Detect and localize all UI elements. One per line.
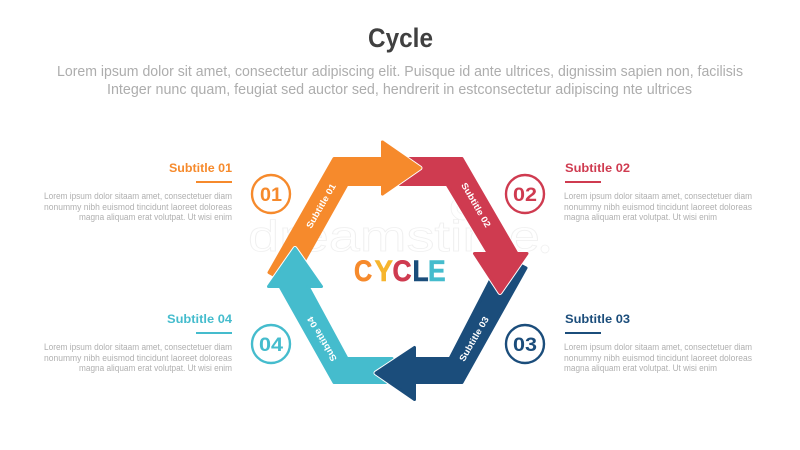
text block: subtitle 02: Subtitle 02 [565,161,630,175]
center word: Y [374,255,393,288]
text block: subtitle 01: nonummy nibh euismod tincidunt laoreet doloreas [44,202,232,212]
number badge 02: 02 [513,185,537,206]
number badge 01: 01 [260,185,282,206]
center word: L [412,253,429,287]
arrowhead: orange overlapping red [375,142,420,194]
label: arrow 02: Subtitle 02 [459,181,493,229]
text block: subtitle 04: Lorem ipsum dolor sitaam amet, consectetuer diam [44,342,232,352]
label: arrow 01: Subtitle 01 [304,182,338,230]
text block: subtitle 04: Subtitle 04 [167,312,232,326]
number badge 01 [252,175,290,213]
intro text [57,63,743,98]
center word [354,253,446,288]
arrow: orange step 01 [269,142,420,284]
intro text: Lorem ipsum dolor sit amet, consectetur adipiscing elit. Puisque id ante ultrices, dignissim sapien non, facilisis [57,63,743,80]
arrow: teal step 04 [268,248,392,382]
intro text: Integer nunc quam, feugiat sed auctor sed, hendrerit in estconsectetur adipiscing nte ultrices [107,81,692,98]
text block: subtitle 02: nonummy nibh euismod tincidunt laoreet doloreas [564,202,752,212]
label: arrow 03: Subtitle 03 [457,315,491,363]
text block: subtitle 03: nonummy nibh euismod tincidunt laoreet doloreas [564,353,752,363]
text block: subtitle 01: Subtitle 01 [169,161,232,175]
arrow: navy step 03 [376,256,526,400]
title: Cycle [368,23,433,53]
text block: subtitle 03: Subtitle 03 [565,312,630,326]
text block: subtitle 04: magna aliquam erat volutpat. Ut wisi enim [79,363,232,373]
text block: subtitle 01 [44,161,232,222]
center word: C [354,254,372,287]
number badge 04 [252,325,290,363]
number badge 02 [506,175,544,213]
text block: subtitle 04: nonummy nibh euismod tincidunt laoreet doloreas [44,353,232,363]
text block: subtitle 02 [564,161,752,222]
number badge 03: 03 [513,335,537,356]
text block: subtitle 03 [564,312,752,373]
watermark [248,196,549,261]
text block: subtitle 04 [44,312,232,373]
center word: C [392,253,412,287]
center word: E [428,253,446,287]
number badge 04: 04 [259,335,283,356]
text block: subtitle 02: Lorem ipsum dolor sitaam amet, consectetuer diam [564,191,752,201]
text block: subtitle 01: magna aliquam erat volutpat. Ut wisi enim [79,212,232,222]
arrow: red step 02 [400,158,527,292]
text block: subtitle 01: Lorem ipsum dolor sitaam amet, consectetuer diam [44,191,232,201]
watermark: dreamstime [248,212,540,261]
text block: subtitle 03: magna aliquam erat volutpat. Ut wisi enim [564,363,717,373]
label: arrow 04: Subtitle 04 [305,315,339,363]
number badge 03 [506,325,544,363]
text block: subtitle 03: Lorem ipsum dolor sitaam amet, consectetuer diam [564,342,752,352]
text block: subtitle 02: magna aliquam erat volutpat. Ut wisi enim [564,212,717,222]
